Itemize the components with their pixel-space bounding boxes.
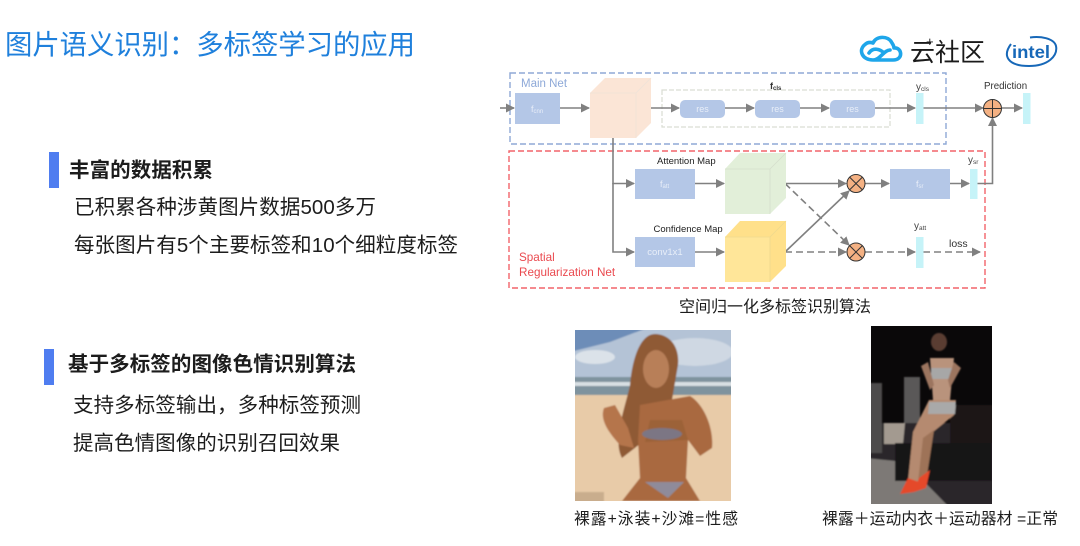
title: 图片语义识别：多标签学习的应用 <box>5 29 415 60</box>
block: res 3: res <box>846 104 859 114</box>
block: fsr: f <box>916 179 919 189</box>
bullet block: algorithm <box>44 349 361 455</box>
block: fcnn: cnn <box>534 109 543 115</box>
label: main net: Main Net <box>521 78 568 90</box>
label: yatt: y <box>914 221 919 232</box>
panel: spatial regularization net <box>509 151 985 288</box>
bar: ycls <box>916 93 924 124</box>
photo: gym scene (abstract colour-block stand-in) <box>866 326 996 508</box>
bar: yatt <box>916 237 924 268</box>
block: res 1 <box>680 100 725 118</box>
block: conv1x1 <box>635 237 695 267</box>
body line 1: 已积累各种涉黄图片数据500多万 <box>74 196 376 219</box>
caption: gym photo: 裸露＋运动内衣＋运动器材 =正常 <box>822 510 1058 528</box>
label: attention map: Attention Map <box>657 156 716 167</box>
caption: beach photo: 裸露+泳装+沙滩=性感 <box>574 510 738 528</box>
panel: fcls group <box>662 90 890 127</box>
label: confidence map: Confidence Map <box>654 224 723 235</box>
block: fatt <box>635 169 695 199</box>
heading: 基于多标签的图像色情识别算法 <box>68 353 356 376</box>
block: fcnn <box>515 93 560 124</box>
block: res 2: res <box>771 104 784 114</box>
cube: confidence <box>725 221 786 282</box>
network diagram <box>500 73 1030 288</box>
label: prediction: Prediction <box>984 81 1027 92</box>
heading: 丰富的数据积累 <box>69 158 213 182</box>
logo: Tencent Cloud community: + <box>926 34 934 49</box>
photo: beach scene (abstract colour-block stand-in) <box>575 330 731 501</box>
block: res 1: res <box>696 104 709 114</box>
label: spatial regularization net: Spatial <box>519 251 555 264</box>
bar: ysr <box>970 169 978 199</box>
label: fcls: cls <box>773 86 782 92</box>
block: res 2 <box>755 100 800 118</box>
body line 1: 支持多标签输出，多种标签预测 <box>73 394 361 417</box>
logo: Tencent Cloud community: 社区 <box>935 39 985 67</box>
panel: main net <box>510 73 946 144</box>
block: fcnn: f <box>531 104 534 114</box>
icon: sum node <box>984 100 1002 118</box>
cube: feature map <box>590 78 651 138</box>
label: yatt: att <box>919 225 926 232</box>
icon: cloud <box>862 37 901 60</box>
logo: Intel <box>1007 37 1056 66</box>
block: fatt: f <box>660 179 663 189</box>
block: conv1x1: conv1x1 <box>647 247 683 258</box>
body line 2: 提高色情图像的识别召回效果 <box>73 432 340 455</box>
diagram caption: 空间归一化多标签识别算法 <box>679 297 871 316</box>
logo: Intel: intel <box>1012 42 1050 62</box>
block: res 3 <box>830 100 875 118</box>
label: ycls: cls <box>921 86 930 93</box>
body line 2: 每张图片有5个主要标签和10个细粒度标签 <box>74 234 458 257</box>
block: fsr <box>890 169 950 199</box>
label: ycls: y <box>916 82 921 93</box>
accent bar <box>49 152 59 188</box>
icon: multiply node top <box>847 174 865 192</box>
bar: prediction output <box>1023 93 1030 124</box>
label: ysr: y <box>968 155 973 166</box>
label: regularization net: Regularization Net <box>519 266 616 279</box>
logo: Tencent Cloud community <box>862 34 985 67</box>
cube: attention <box>725 153 786 214</box>
logo text: 云 <box>910 39 935 67</box>
label: ysr: sr <box>973 159 979 166</box>
arrows <box>500 108 1022 252</box>
accent bar <box>44 349 54 385</box>
label: loss: loss <box>949 238 968 250</box>
block: fatt: att <box>663 184 670 190</box>
block: fsr: sr <box>919 184 924 190</box>
icon: multiply node bottom <box>847 243 865 261</box>
bullet block: data accumulation <box>49 152 458 257</box>
label: fcls: f <box>770 81 773 91</box>
